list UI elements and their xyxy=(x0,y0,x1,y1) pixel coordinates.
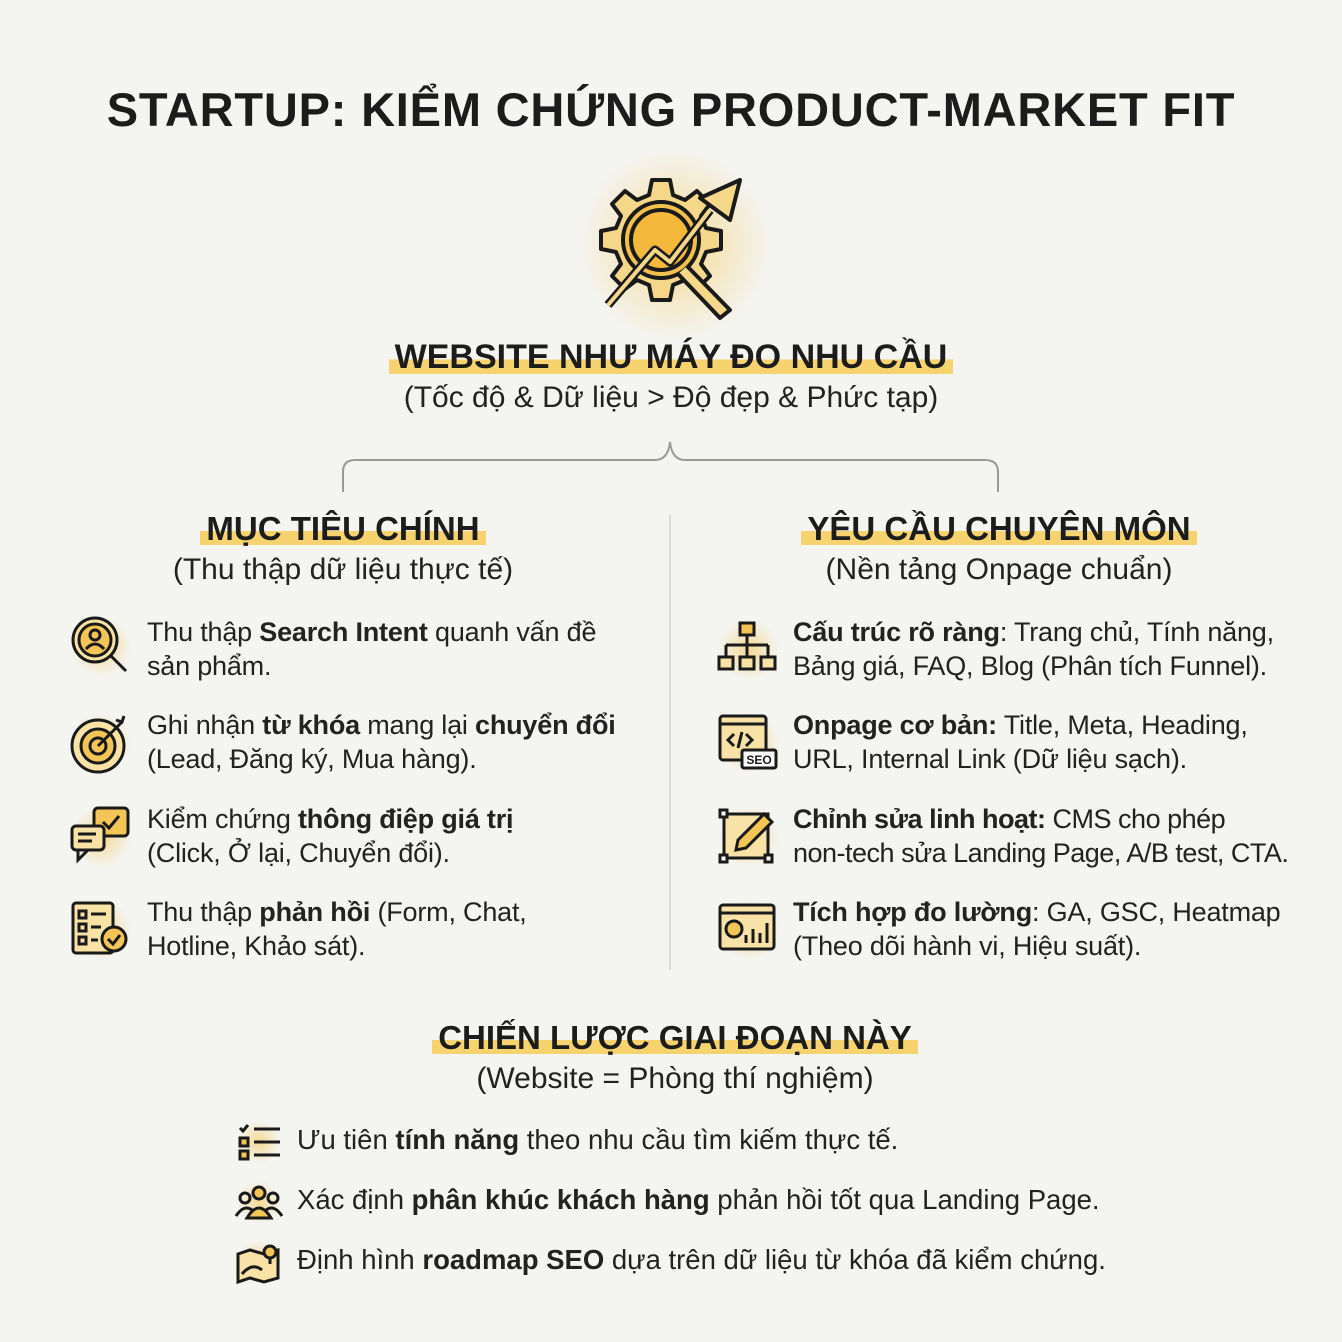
heading: chien luoc: CHIẾN LƯỢC GIAI ĐOẠN NÀY xyxy=(438,1019,912,1056)
item 1 xyxy=(72,616,596,681)
item 1: Thu thập Search Intent quanh vấn đề xyxy=(147,617,596,647)
item 3: (Click, Ở lại, Chuyển đổi). xyxy=(147,838,450,868)
strategy 3 xyxy=(236,1242,1106,1284)
item r1: Cấu trúc rõ ràng: Trang chủ, Tính năng, xyxy=(793,617,1274,647)
item r1: Bảng giá, FAQ, Blog (Phân tích Funnel). xyxy=(793,651,1267,681)
strategy 2: Xác định phân khúc khách hàng phản hồi tốt qua Landing Page. xyxy=(297,1184,1100,1215)
icon: edit pencil xyxy=(716,804,782,870)
heading: muc tieu: MỤC TIÊU CHÍNH xyxy=(206,510,480,547)
strategy 1: Ưu tiên tính năng theo nhu cầu tìm kiếm thực tế. xyxy=(297,1124,898,1155)
icon: analytics dashboard xyxy=(716,897,782,963)
item r2 xyxy=(718,710,1248,774)
item r2: Onpage cơ bản: Title, Meta, Heading, xyxy=(793,710,1248,740)
item 2 xyxy=(70,710,616,774)
item 4 xyxy=(72,897,527,961)
item r3: non-tech sửa Landing Page, A/B test, CTA. xyxy=(793,838,1288,868)
heading: yeu cau: YÊU CẦU CHUYÊN MÔN xyxy=(807,510,1191,547)
item r2: URL, Internal Link (Dữ liệu sạch). xyxy=(793,744,1187,774)
strategy 3: Định hình roadmap SEO dựa trên dữ liệu từ khóa đã kiểm chứng. xyxy=(297,1244,1106,1275)
icon: checklist form xyxy=(68,897,134,963)
icon: code SEO xyxy=(716,710,782,776)
item 3 xyxy=(70,804,513,868)
title: STARTUP: KIỂM CHỨNG PRODUCT-MARKET FIT xyxy=(107,83,1235,136)
item 4: Thu thập phản hồi (Form, Chat, xyxy=(147,897,527,927)
subheading right: (Nền tảng Onpage chuẩn) xyxy=(826,553,1172,586)
item 2: Ghi nhận từ khóa mang lại chuyển đổi xyxy=(147,710,616,740)
heading: website: WEBSITE NHƯ MÁY ĐO NHU CẦU xyxy=(395,338,947,376)
item 3: Kiểm chứng thông điệp giá trị xyxy=(147,804,513,834)
item 4: Hotline, Khảo sát). xyxy=(147,931,365,961)
icon: group xyxy=(234,1180,284,1224)
item r3: Chỉnh sửa linh hoạt: CMS cho phép xyxy=(793,804,1225,834)
item 1: sản phẩm. xyxy=(147,651,271,681)
item 2: (Lead, Đăng ký, Mua hàng). xyxy=(147,744,476,774)
icon: gear with magnifier and growth arrow xyxy=(560,150,790,340)
icon: chat check xyxy=(68,804,134,870)
item r3 xyxy=(718,804,1288,868)
icon: list xyxy=(234,1120,284,1164)
panel: strategy list xyxy=(234,1122,1106,1284)
item r4: (Theo dõi hành vi, Hiệu suất). xyxy=(793,931,1141,961)
item r4 xyxy=(718,897,1280,961)
item r4: Tích hợp đo lường: GA, GSC, Heatmap xyxy=(793,897,1280,927)
subheading left: (Thu thập dữ liệu thực tế) xyxy=(173,553,513,586)
icon: target xyxy=(68,710,134,776)
icon: sitemap xyxy=(716,617,782,683)
subheading: (Tốc độ & Dữ liệu > Độ đẹp & Phức tạp) xyxy=(404,381,938,414)
panel: right requirements xyxy=(718,510,1288,961)
panel: left goals xyxy=(70,510,616,961)
item r1 xyxy=(718,617,1274,681)
icon: search user xyxy=(68,613,134,679)
connector bracket xyxy=(342,442,999,492)
icon: map pin xyxy=(234,1240,284,1284)
subheading bottom: (Website = Phòng thí nghiệm) xyxy=(476,1062,874,1095)
icon: code SEO: SEO xyxy=(746,753,772,767)
